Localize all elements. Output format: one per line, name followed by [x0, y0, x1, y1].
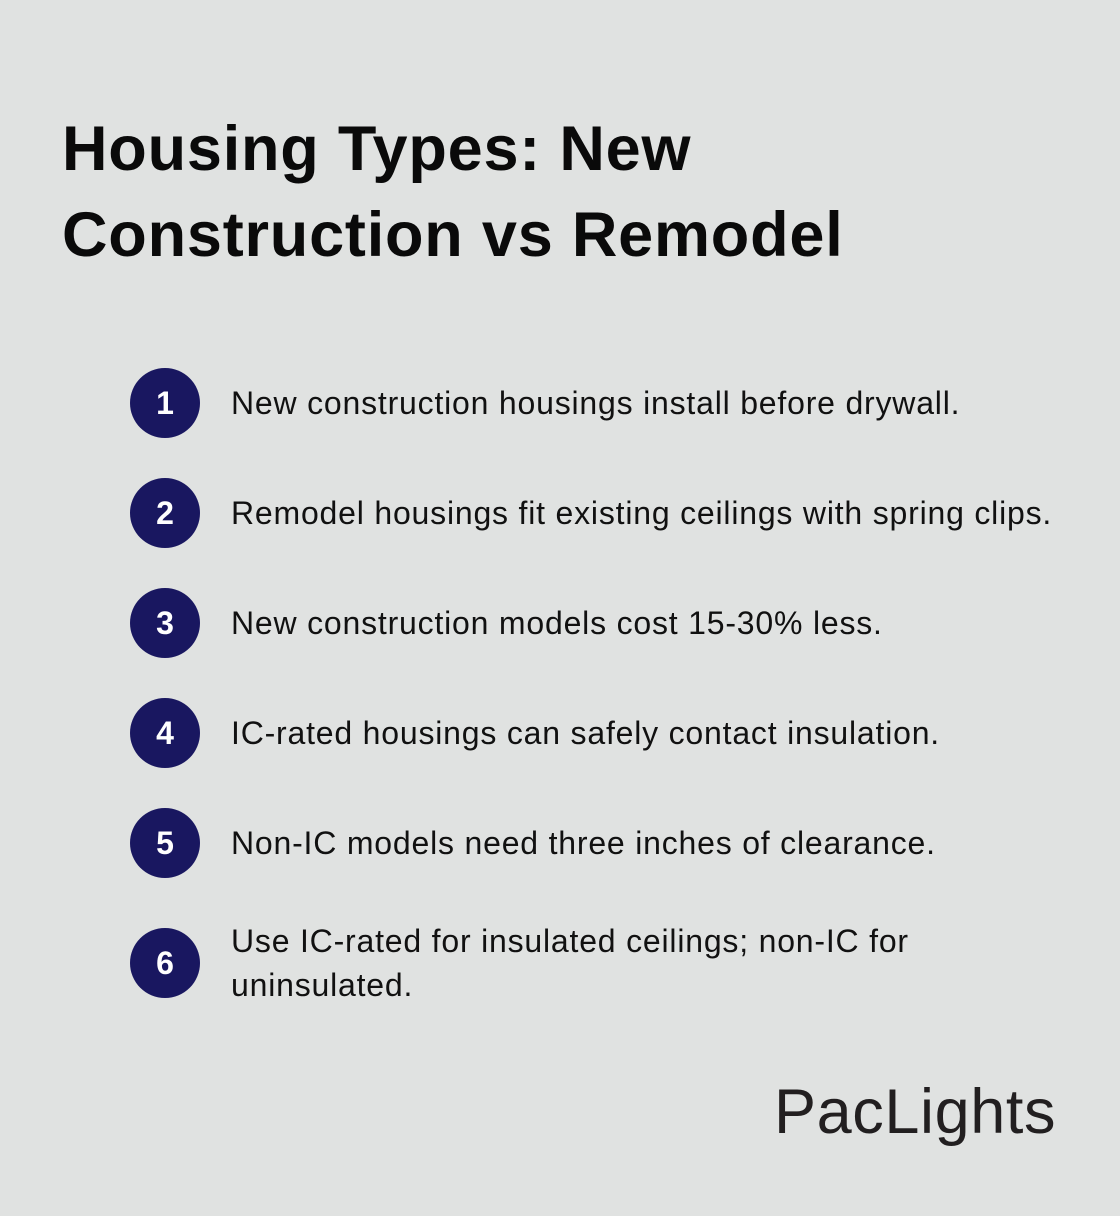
- title: Construction vs Remodel: [62, 200, 844, 270]
- title: [62, 114, 844, 270]
- item 5: 5: [156, 825, 174, 861]
- item 4: [130, 698, 940, 768]
- item 4: 4: [156, 715, 174, 751]
- item 5: Non-IC models need three inches of clearance.: [231, 825, 936, 861]
- item 6: 6: [156, 945, 174, 981]
- item 2: [130, 478, 1052, 548]
- title: Housing Types: New: [62, 114, 691, 184]
- item 2: 2: [156, 495, 174, 531]
- item 1: [130, 368, 960, 438]
- item 3: New construction models cost 15-30% less.: [231, 605, 883, 641]
- logo: PacLights: [774, 1077, 1056, 1147]
- item 1: New construction housings install before drywall.: [231, 385, 960, 421]
- item 2: Remodel housings fit existing ceilings with spring clips.: [231, 495, 1052, 531]
- item 6: Use IC-rated for insulated ceilings; non-IC for uninsulated.: [231, 923, 909, 1003]
- item 3: [130, 588, 883, 658]
- item 1: 1: [156, 385, 174, 421]
- item 3: 3: [156, 605, 174, 641]
- item 5: [130, 808, 936, 878]
- item 4: IC-rated housings can safely contact insulation.: [231, 715, 940, 751]
